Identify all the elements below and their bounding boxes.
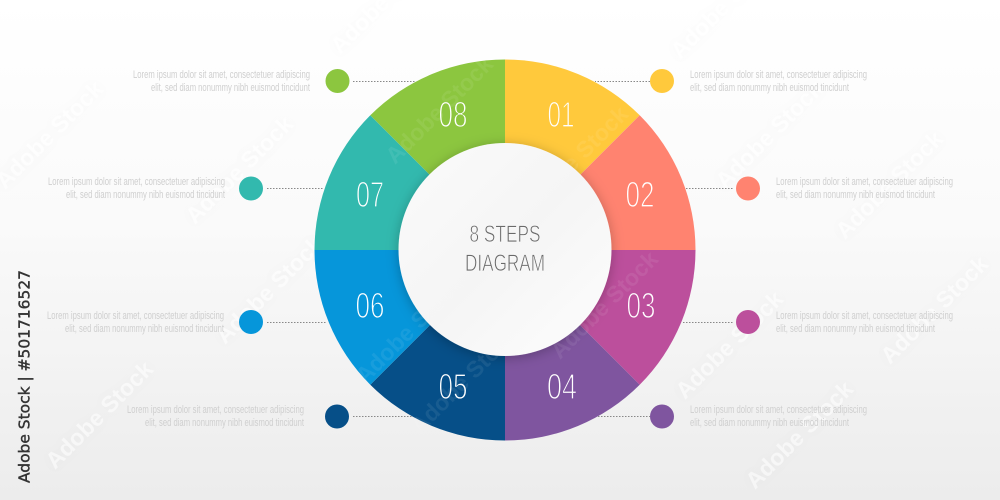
watermark over the ring: Adobe Stock [545,246,663,364]
centre title [465,221,545,277]
segment 07 [314,115,505,250]
watermark pattern: Adobe Stock [830,126,948,244]
step 07 marker and text [48,176,263,201]
number 05: 05 [438,366,468,407]
segment 02 [505,115,696,250]
number 06: 06 [356,285,384,326]
step 01 marker and text: Lorem ipsum dolor sit amet, consectetuer adipiscing [690,69,867,81]
watermark pattern: Adobe Stock [875,251,993,369]
number 08: 08 [438,94,468,135]
segment 04 [505,250,640,440]
segment numbers [356,94,656,407]
step 02 marker and text [736,176,953,201]
step 04 marker and text: elit, sed diam nonummy nibh euismod tincidunt [690,417,849,429]
step 05 marker and text [127,404,349,429]
dotted connectors [267,82,733,416]
step 08 marker and text [133,69,350,94]
watermark pattern: Adobe Stock [710,76,828,194]
step 08 marker and text: elit, sed diam nonummy nibh euismod tincidunt [151,82,310,94]
step 05 marker and text: elit, sed diam nonummy nibh euismod tincidunt [145,417,304,429]
segment 01 [505,60,640,250]
segment 08 [370,60,505,250]
step 06 marker and text: elit, sed diam nonummy nibh euismod tincidunt [65,323,224,335]
step 04 marker and text: Lorem ipsum dolor sit amet, consectetuer adipiscing [690,404,867,416]
ring of eight segments [314,60,696,440]
segment 03 [505,250,696,385]
number 04: 04 [547,366,577,407]
step 08 marker and text: Lorem ipsum dolor sit amet, consectetuer adipiscing [133,69,310,81]
segment 05 [370,250,505,440]
step 06 marker and text [47,310,263,335]
watermark over the ring: Adobe Stock [515,101,633,219]
number 03: 03 [626,285,656,326]
watermark pattern: Adobe Stock [180,111,298,229]
watermark over the ring: Adobe Stock [405,321,523,439]
watermark over the ring [350,51,663,439]
step 03 marker and text: elit, sed diam nonummy nibh euismod tincidunt [776,323,935,335]
step 05 marker and text: Lorem ipsum dolor sit amet, consectetuer adipiscing [127,404,304,416]
stock id caption: Adobe Stock | #501716527 [16,270,34,483]
watermark pattern: Adobe Stock [210,231,328,349]
watermark pattern: Adobe Stock [670,286,788,404]
centre title: DIAGRAM [465,250,545,277]
step 07 marker and text: Lorem ipsum dolor sit amet, consectetuer adipiscing [48,176,225,188]
centre title: 8 STEPS [470,221,540,248]
step 01 marker and text: elit, sed diam nonummy nibh euismod tincidunt [690,82,849,94]
step 03 marker and text [736,310,953,335]
centre disc [398,143,612,356]
number 01: 01 [548,94,574,135]
watermark over the ring: Adobe Stock [380,51,498,169]
watermark over the ring: Adobe Stock [350,271,468,389]
step 07 marker and text: elit, sed diam nonummy nibh euismod tincidunt [66,189,225,201]
number 07: 07 [356,174,384,215]
watermark pattern: Adobe Stock [740,376,858,494]
segment 06 [314,250,505,385]
watermark pattern: Adobe Stock [40,356,158,474]
number 02: 02 [626,174,654,215]
step 02 marker and text: elit, sed diam nonummy nibh euismod tincidunt [776,189,935,201]
step 04 marker and text [650,404,867,429]
step 01 marker and text [650,69,867,94]
step 06 marker and text: Lorem ipsum dolor sit amet, consectetuer adipiscing [47,310,224,322]
